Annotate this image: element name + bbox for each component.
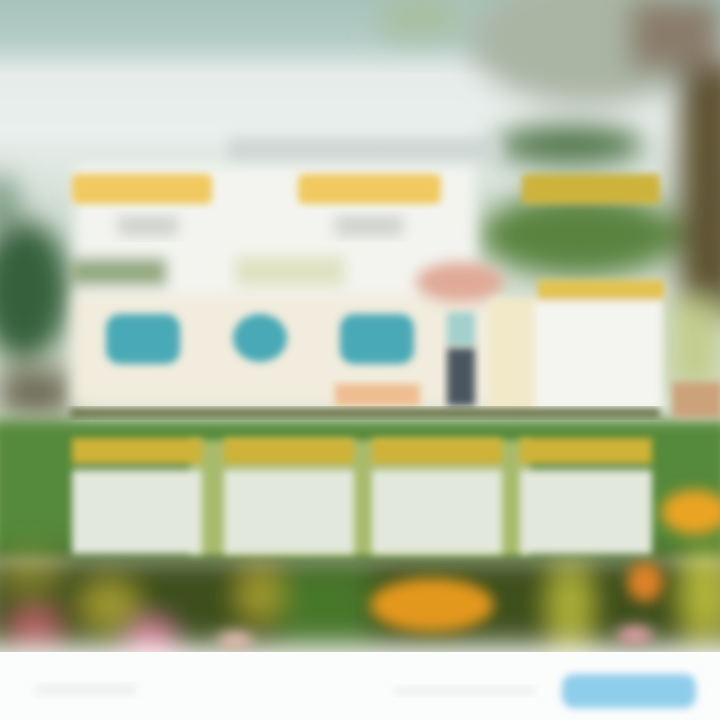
orange tab (335, 384, 420, 406)
pale gap band behind cards (190, 440, 530, 555)
footer button (562, 674, 696, 708)
orange flowers (217, 490, 720, 648)
right panel (490, 280, 720, 418)
text block 2 (335, 216, 403, 236)
tree canopy top right (375, 0, 720, 390)
card 2 (224, 438, 354, 554)
card 4 (520, 438, 652, 554)
teal badge 3 (340, 314, 414, 364)
text block 1 (118, 216, 178, 236)
lawn (0, 420, 720, 560)
sky background (0, 0, 720, 440)
teal badge 1 (106, 314, 180, 364)
card 3 (372, 438, 502, 554)
trees on left (0, 175, 70, 415)
footer text left (36, 684, 136, 696)
heading bar 3 (522, 174, 660, 204)
upper panel backdrop (72, 138, 502, 407)
footer text right (395, 686, 535, 696)
footer (0, 652, 720, 720)
flower bed (0, 550, 720, 647)
card 1 (72, 438, 202, 554)
panel shadow (70, 408, 660, 418)
teal badge 2 (233, 314, 287, 362)
heading bar 1 (72, 174, 212, 204)
heading bar 2 (298, 174, 441, 204)
person with umbrella (416, 262, 504, 406)
